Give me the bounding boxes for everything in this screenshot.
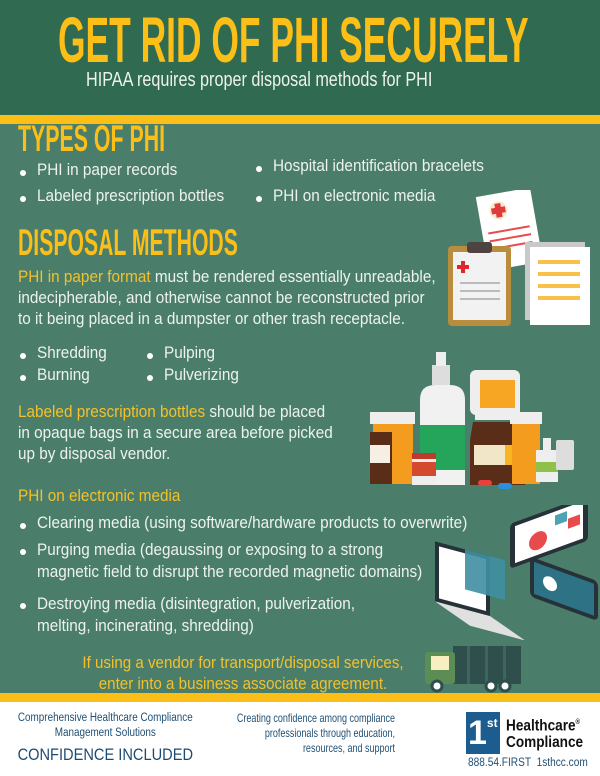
electronic list: melting, incinerating, shredding) [37,616,254,635]
footer right tagline [237,711,395,755]
vendor callout: If using a vendor for transport/disposal services, [82,653,404,672]
title: GET RID OF PHI SECURELY [58,4,529,76]
icon: garbage truck [425,646,521,692]
icon: electronic devices [435,505,598,640]
methods list: Shredding [37,343,107,362]
types list: PHI on electronic media [273,186,435,205]
icon: medicine bottles [370,352,574,489]
logo: 888.54.FIRST 1sthcc.com [468,757,588,769]
paper format paragraph: indecipherable, and otherwise cannot be reconstructed prior [18,288,425,307]
electronic list: Destroying media (disintegration, pulverization, [37,594,355,613]
logo: 1st [468,714,498,752]
electronic list: Purging media (degaussing or exposing to a strong [37,540,383,559]
heading: disposal methods: DISPOSAL METHODS [18,222,238,263]
subtitle: HIPAA requires proper disposal methods for PHI [86,69,432,91]
heading: types of phi: TYPES OF PHI [18,118,165,159]
methods list: Burning [37,365,90,384]
vendor callout: enter into a business associate agreement. [99,674,387,693]
types list: PHI in paper records [37,160,177,179]
logo: Healthcare® [506,717,580,734]
header band [0,0,600,115]
vendor callout [82,653,404,693]
paper format paragraph: to it being placed in a dumpster or other trash receptacle. [18,309,405,328]
paper format paragraph [18,267,436,328]
types list: Labeled prescription bottles [37,186,224,205]
footer left text: Management Solutions [55,727,156,739]
types list [20,156,484,205]
footer right tagline: resources, and support [303,741,395,755]
bottles paragraph [18,402,333,463]
bottles paragraph: Labeled prescription bottles should be placed [18,402,325,421]
types list: Hospital identification bracelets [273,156,484,175]
yellow divider bottom [0,693,600,702]
paper format paragraph: PHI in paper format must be rendered essentially unreadable, [18,267,436,286]
electronic list [20,513,467,635]
methods list: Pulverizing [164,365,239,384]
footer left text [18,712,193,764]
logo [466,712,588,769]
footer left text: CONFIDENCE INCLUDED [18,745,193,764]
methods list [20,343,239,384]
body background [0,124,600,693]
methods list: Pulping [164,343,215,362]
bottles paragraph: in opaque bags in a secure area before picked [18,423,333,442]
footer left text: Comprehensive Healthcare Compliance [18,712,193,724]
icon: clipboard and documents [448,190,590,326]
yellow divider top [0,115,600,124]
logo: Compliance [506,734,583,751]
footer right tagline: Creating confidence among compliance [237,711,395,725]
electronic list: magnetic field to disrupt the recorded magnetic domains) [37,562,422,581]
electronic media heading: PHI on electronic media [18,486,180,505]
electronic list: Clearing media (using software/hardware products to overwrite) [37,513,467,532]
footer right tagline: professionals through education, [265,726,395,740]
bottles paragraph: up by disposal vendor. [18,444,170,463]
